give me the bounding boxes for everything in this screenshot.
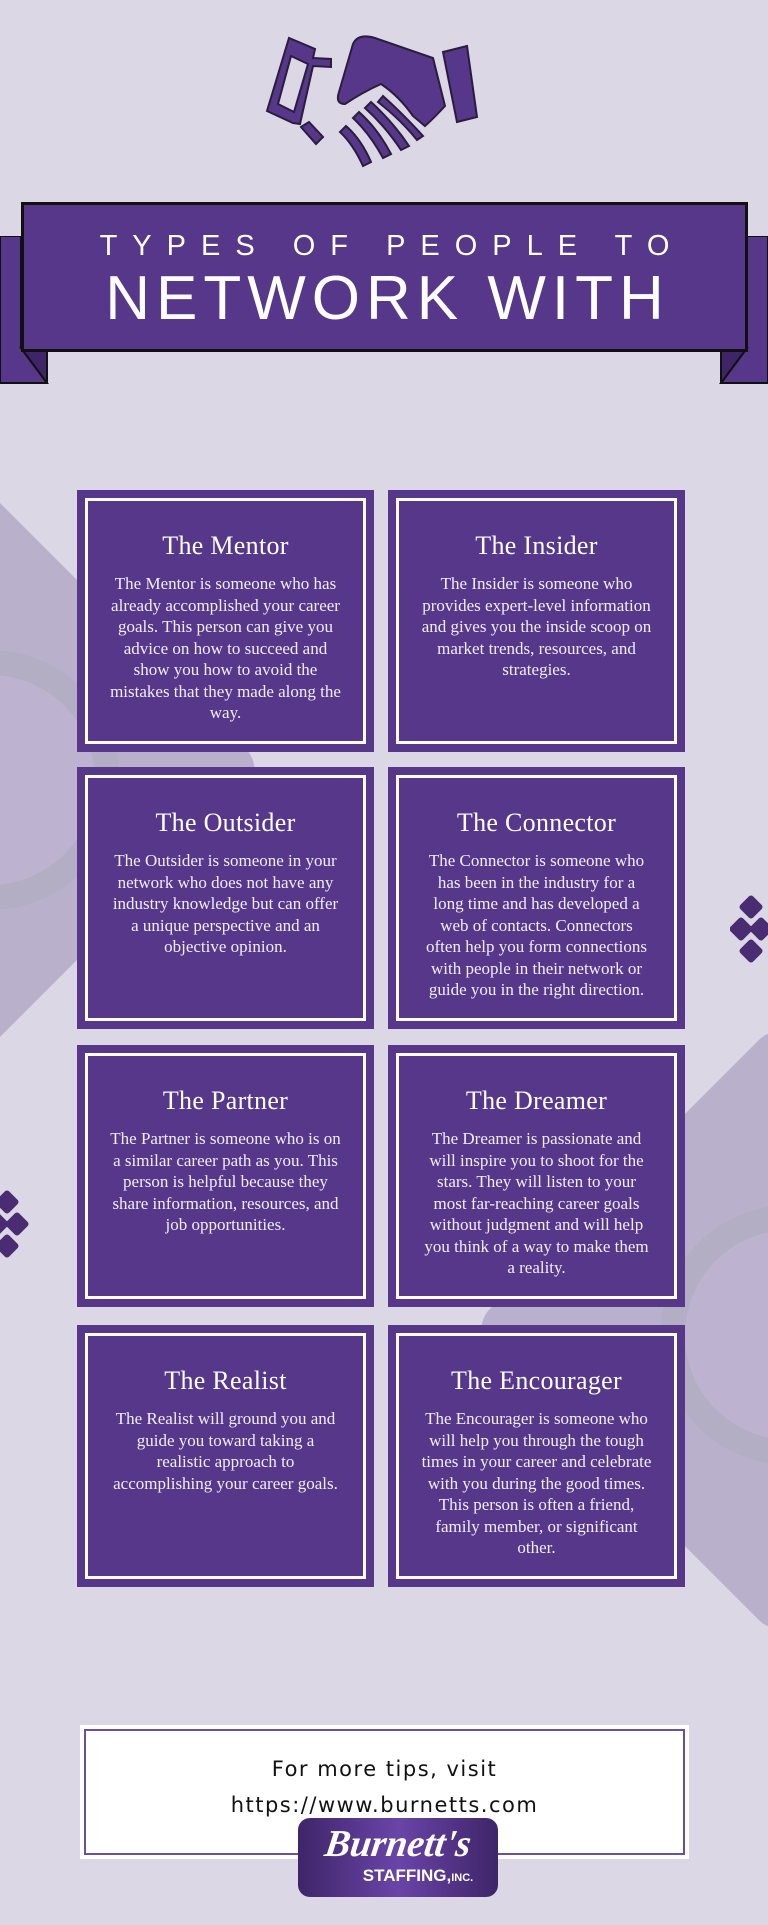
panel: The Connector: The Connector is someone who has been in the industry for a long time and has developed a web of contacts. Connectors often help you form connections with people in their network or guide you in the right direction. bbox=[426, 851, 647, 999]
panel: The Realist: The Realist bbox=[164, 1366, 287, 1395]
panel: The Realist bbox=[77, 1325, 374, 1587]
panel: The Dreamer bbox=[388, 1045, 685, 1307]
banner tail right bbox=[719, 236, 768, 384]
panel: The Outsider: The Outsider is someone in your network who does not have any industry knowledge but can offer a unique perspective and an objective opinion. bbox=[113, 851, 338, 956]
panel: The Outsider: The Outsider bbox=[155, 808, 296, 837]
footer text bbox=[231, 1757, 538, 1817]
title line 1: TYPES OF PEOPLE TO bbox=[100, 230, 684, 262]
panel: The Encourager: The Encourager bbox=[451, 1366, 622, 1395]
panel: The Connector: The Connector bbox=[457, 808, 616, 837]
panel: The Encourager bbox=[388, 1325, 685, 1587]
logo: Burnett's Staffing bbox=[298, 1818, 498, 1897]
panel: The Partner: The Partner bbox=[163, 1086, 288, 1115]
panel: The Mentor bbox=[77, 490, 374, 752]
icon: handshake bbox=[266, 35, 478, 168]
icon: small diamond cluster left bbox=[0, 1190, 28, 1258]
footer text: For more tips, visit bbox=[272, 1757, 497, 1781]
panel: The Encourager: The Encourager is someone who will help you through the tough times in your career and celebrate with you during the good times. This person is often a friend, family member, or significant other. bbox=[422, 1409, 651, 1557]
panel: The Realist: The Realist will ground you and guide you toward taking a realistic approach to accomplishing your career goals. bbox=[113, 1409, 338, 1492]
panel: The Partner: The Partner is someone who is on a similar career path as you. This person is helpful because they share information, resources, and job opportunities. bbox=[110, 1129, 341, 1234]
footer text: https://www.burnetts.com bbox=[231, 1793, 538, 1817]
panel: The Mentor: The Mentor is someone who has already accomplished your career goals. This person can give you advice on how to succeed and show you how to avoid the mistakes that they made along the way. bbox=[110, 574, 341, 722]
title banner bbox=[21, 202, 748, 352]
panel: The Connector bbox=[388, 767, 685, 1029]
panel: The Partner bbox=[77, 1045, 374, 1307]
panel: The Dreamer: The Dreamer bbox=[466, 1086, 607, 1115]
panel: The Insider bbox=[388, 490, 685, 752]
logo: Burnett's Staffing: Burnett's bbox=[322, 1823, 474, 1865]
panel: The Outsider bbox=[77, 767, 374, 1029]
logo: Burnett's Staffing: STAFFING,INC. bbox=[363, 1866, 473, 1885]
panel: The Dreamer: The Dreamer is passionate and will inspire you to shoot for the stars. They will listen to your most far-reaching career goals without judgment and will help you think of a way to make them a reality. bbox=[424, 1129, 649, 1277]
icon: small diamond cluster right bbox=[730, 896, 768, 962]
panel: The Insider: The Insider bbox=[475, 531, 598, 560]
panel: The Insider: The Insider is someone who provides expert-level information and gives you the inside scoop on market trends, resources, and strategies. bbox=[422, 574, 651, 679]
panel: The Mentor: The Mentor bbox=[162, 531, 289, 560]
title line 2: NETWORK WITH bbox=[105, 264, 670, 333]
banner tail left bbox=[0, 236, 49, 384]
footer callout box bbox=[80, 1725, 689, 1859]
